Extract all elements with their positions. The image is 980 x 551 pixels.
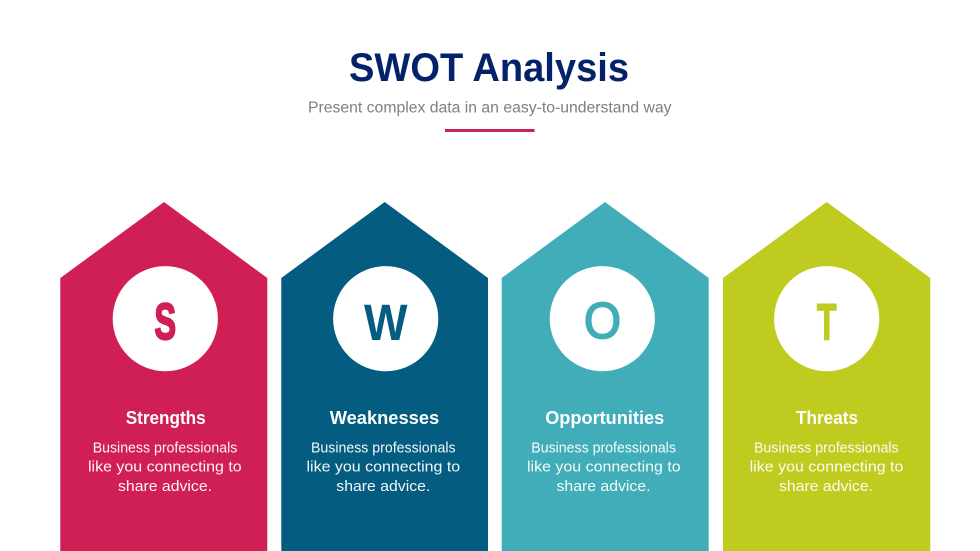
text: threats description: Business professionals [754, 439, 899, 456]
text: threats description: share advice. [779, 478, 873, 495]
arrow shape: threats [723, 202, 930, 551]
text: threats description: like you connecting to [750, 459, 903, 476]
panel: opportunities [502, 202, 709, 551]
title underline [445, 129, 534, 132]
heading: threats: Threats [796, 407, 858, 428]
text: opportunities description: share advice. [556, 478, 650, 495]
text: strengths description: Business professionals [93, 439, 237, 456]
text: weaknesses description [306, 439, 460, 495]
arrow shape: weaknesses [281, 202, 488, 551]
text: weaknesses description: Business professionals [311, 439, 456, 456]
icon: letter T badge [774, 266, 879, 371]
panel: weaknesses [281, 202, 488, 551]
text: weaknesses description: share advice. [336, 478, 430, 495]
text: strengths description [88, 439, 242, 495]
icon: letter S badge [113, 266, 218, 371]
icon: letter W badge: W [364, 294, 408, 351]
panel: strengths [60, 202, 267, 551]
text: opportunities description: Business professionals [531, 439, 676, 456]
arrow shape: opportunities [502, 202, 709, 551]
icon: letter O badge: O [584, 292, 621, 349]
title: SWOT Analysis [349, 46, 629, 90]
heading: strengths: Strengths [126, 407, 206, 428]
icon: letter S badge: S [154, 293, 176, 350]
heading: weaknesses: Weaknesses [330, 407, 439, 428]
text: strengths description: like you connecting to [88, 459, 242, 476]
icon: letter O badge [550, 266, 655, 371]
arrow shape: strengths [60, 202, 267, 551]
icon: letter T badge: T [817, 294, 836, 350]
text: weaknesses description: like you connecting to [306, 459, 460, 476]
text: opportunities description [527, 439, 681, 495]
heading: opportunities: Opportunities [545, 407, 664, 428]
panel: threats [723, 202, 930, 551]
text: strengths description: share advice. [118, 478, 212, 495]
icon: letter W badge [333, 266, 438, 371]
text: opportunities description: like you connecting to [527, 459, 681, 476]
subtitle: Present complex data in an easy-to-understand way [308, 100, 672, 116]
header [308, 46, 672, 132]
text: threats description [750, 439, 903, 495]
